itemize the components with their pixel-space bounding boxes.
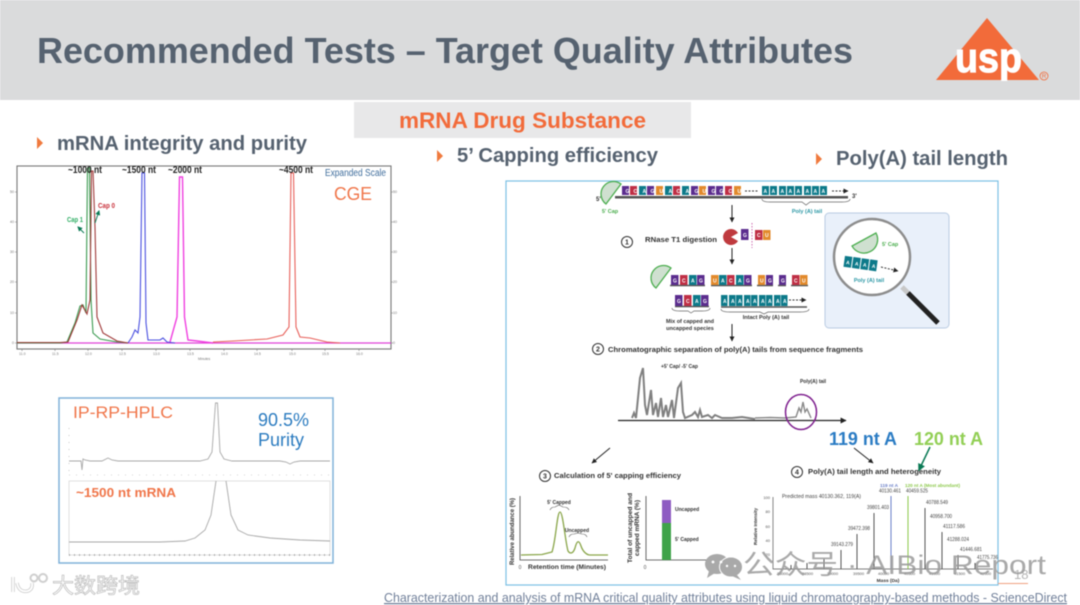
chart: deconvoluted mass spectrum: 40000 [878, 571, 890, 576]
axis labels: 15.5 [322, 352, 329, 356]
USP logo: R [1042, 74, 1047, 80]
axis labels: Minutes [198, 357, 211, 361]
callout: 119 nt A: 119 nt A [829, 429, 897, 449]
label: Cap 1 [67, 217, 84, 233]
page number: 18 [1014, 567, 1028, 582]
arrow [731, 324, 733, 341]
mRNA strand: AAAAAAAA [764, 189, 826, 195]
bullet: mRNA integrity and purity: mRNA integrity and purity [57, 133, 308, 155]
peak labels: ~2000 nt [168, 165, 203, 176]
capped and uncapped species [666, 295, 714, 332]
step 2: chromatographic separation: Chromatographic separation of poly(A) tails from sequence fragments [608, 345, 863, 354]
axis labels: 20 [10, 280, 14, 284]
trace: baseline [17, 342, 391, 344]
lower chromatogram [69, 481, 330, 555]
chart: deconvoluted mass spectrum: 80 [766, 509, 771, 514]
chart: deconvoluted mass spectrum: 39472.398 [848, 526, 870, 532]
arrow [731, 248, 733, 264]
bullet: Poly(A) tail length: Poly(A) tail length [836, 148, 1008, 170]
peak labels [68, 165, 314, 176]
intact Poly(A) tail [721, 295, 809, 321]
axis labels: 11.0 [19, 352, 26, 356]
section banner [354, 102, 691, 138]
chart: deconvoluted mass spectrum: 38500 [802, 571, 814, 576]
chart: retention time curve: 0 [519, 565, 522, 571]
chart: deconvoluted mass spectrum: 40130.461 [879, 488, 901, 494]
magnifier inset: AAAA [846, 260, 876, 270]
sequence fragment chromatogram: +5' Cap/ -5' Cap [661, 364, 698, 370]
capped and uncapped species: GCAG [677, 299, 707, 305]
mRNA strand: 5' [596, 197, 601, 203]
arrow [731, 205, 733, 222]
axis labels: 10 [10, 311, 14, 315]
trace: Cap 0 [17, 171, 128, 343]
intact Poly(A) tail: Intact Poly (A) tail [743, 315, 790, 321]
purity callout: 90.5% [258, 410, 309, 430]
chart: deconvoluted mass spectrum: 39143.279 [831, 542, 853, 548]
magnifier inset: 5' Cap [882, 242, 899, 248]
chart: retention time curve [510, 496, 608, 571]
watermark: WeChat channel: 公众号 · AIBio Report [743, 550, 1047, 580]
peak labels: ~1000 nt [68, 165, 103, 176]
chart: capped vs uncapped bar: 0 [644, 565, 647, 571]
chart: deconvoluted mass spectrum: 40 [766, 538, 771, 543]
USP logo: usp [955, 34, 1022, 81]
step 1: RNase T1 digestion [622, 223, 770, 248]
chart: deconvoluted mass spectrum: Mass (Da) [877, 578, 900, 584]
axis labels: 14.5 [254, 352, 261, 356]
digested fragments [651, 266, 808, 288]
step 1: RNase T1 digestion: 1 [625, 240, 629, 246]
step 2: chromatographic separation: 2 [596, 346, 600, 354]
chart: deconvoluted mass spectrum: 20 [766, 552, 771, 557]
axis labels: 50 [10, 190, 14, 194]
capped and uncapped species: Mix of capped and [666, 319, 714, 325]
panel: CGE electropherogram [10, 165, 397, 361]
axis labels: 10 [393, 311, 397, 315]
axis labels: 50 [393, 190, 397, 194]
watermark: site logo: 大数跨境 [52, 575, 140, 598]
chart: retention time curve: 5' Capped [547, 500, 571, 506]
chart: deconvoluted mass spectrum: 41000 [929, 571, 941, 576]
chart: deconvoluted mass spectrum: 40788.549 [926, 500, 948, 506]
chart: capped vs uncapped bar: Uncapped [675, 507, 699, 513]
label: Cap 0: Cap 0 [98, 203, 115, 210]
title: Recommended Tests – Target Quality Attributes [37, 30, 853, 71]
chart: retention time curve: Retention time (Minutes) [528, 565, 606, 571]
digested fragments: GCAGUACAGUGGCU [673, 278, 806, 284]
axis labels: 40 [10, 220, 14, 224]
chart: deconvoluted mass spectrum: 41446.681 [960, 547, 982, 553]
method label: CGE: CGE [334, 184, 372, 204]
chart: deconvoluted mass spectrum: 119 nt A [880, 483, 899, 488]
magnifier inset [825, 213, 949, 328]
label: Cap 0 [95, 203, 115, 223]
axis labels: 13.0 [153, 352, 160, 356]
chart: capped vs uncapped bar: Total of uncapped and [628, 493, 634, 563]
step 4: Poly(A) tail length and heterogeneity: Poly(A) tail length and heterogeneity [808, 467, 942, 476]
sequence fragment chromatogram: Poly(A) tail [800, 379, 827, 385]
axis labels: 0 [393, 341, 395, 345]
chart: deconvoluted mass spectrum: 41500 [954, 571, 966, 576]
panel: IP-RP-HPLC chromatograms: Purity [258, 430, 304, 450]
axis labels: 20 [393, 280, 397, 284]
chart: deconvoluted mass spectrum: 40459.525 [906, 488, 928, 494]
chart: deconvoluted mass spectrum: 60 [766, 524, 771, 529]
header band [0, 0, 1080, 100]
peak labels: ~4500 nt [279, 165, 314, 176]
step 1: RNase T1 digestion: RNase T1 digestion [645, 235, 717, 244]
axis labels: 12.0 [85, 352, 92, 356]
trace: ~2000 nt [170, 177, 213, 343]
chart: deconvoluted mass spectrum: 41775.736 [977, 555, 998, 561]
chart: deconvoluted mass spectrum: Predicted mass 40130.362, 119(A) [782, 494, 861, 500]
chart: retention time curve: Uncapped [565, 528, 589, 534]
chart: deconvoluted mass spectrum [753, 483, 998, 584]
trace: Cap 1 [17, 168, 128, 343]
axis labels: 30 [10, 250, 14, 254]
mRNA strand: 5' Cap [602, 209, 619, 215]
step 4: Poly(A) tail length and heterogeneity: 4 [795, 470, 799, 476]
arrow [919, 447, 930, 470]
trace: ~1500 nt [128, 173, 175, 343]
watermark: site logo [13, 574, 140, 598]
method label: IP-RP-HPLC [73, 403, 173, 422]
chart: deconvoluted mass spectrum: 100 [763, 495, 771, 500]
chart: deconvoluted mass spectrum: 39801.403 [867, 505, 889, 511]
axis labels: 16.0 [356, 352, 363, 356]
mRNA strand: 3' [852, 194, 857, 200]
source link: Characterization and analysis of mRNA critical quality attributes using liquid chromatography-based methods - ScienceDirect [384, 590, 1067, 605]
sequence fragment chromatogram [618, 364, 846, 430]
length label: ~1500 nt mRNA [76, 485, 177, 500]
panel: LC-MS workflow diagram [506, 181, 998, 585]
step 1: RNase T1 digestion: CU [757, 233, 769, 239]
chart: deconvoluted mass spectrum: 38000 [777, 571, 789, 576]
capped and uncapped species: uncapped species [666, 326, 714, 332]
callout: 120 nt A: 120 nt A [914, 429, 983, 449]
arrow [592, 448, 610, 463]
mRNA strand: GCAGUACAGUGGCU [626, 189, 742, 195]
panel: IP-RP-HPLC chromatograms [59, 398, 333, 563]
chart: capped vs uncapped bar: capped mRNA (%) [635, 500, 641, 556]
step 1: RNase T1 digestion: G [743, 233, 747, 239]
axis labels [10, 190, 397, 361]
arrow [854, 448, 873, 463]
chart: deconvoluted mass spectrum: 41288.024 [947, 537, 969, 543]
magnifier inset: Poly (A) tail [854, 278, 885, 284]
chart: deconvoluted mass spectrum: 41117.586 [943, 524, 965, 530]
axis labels: 14.0 [221, 352, 228, 356]
axis labels: 40 [393, 220, 397, 224]
USP logo [936, 18, 1048, 81]
chart: retention time curve: Relative abundance (%) [510, 498, 516, 565]
chart: capped vs uncapped bar [628, 493, 707, 571]
mRNA strand: Poly (A) tail [792, 209, 823, 215]
trace: ~4500 nt [213, 173, 340, 343]
scale label: Expanded Scale [325, 168, 386, 179]
chart: deconvoluted mass spectrum: 39500 [853, 571, 865, 576]
axis labels: 11.5 [52, 352, 59, 356]
step 3: calculation of capping efficiency: 3 [543, 474, 547, 480]
chart: deconvoluted mass spectrum: 42000 [980, 571, 992, 576]
axis labels: 30 [393, 250, 397, 254]
peak labels: ~1500 nt [122, 165, 157, 176]
bullet: 5' capping efficiency: 5’ Capping efficiency [457, 145, 659, 167]
mRNA strand [596, 182, 857, 215]
chart: deconvoluted mass spectrum: 40958.700 [930, 514, 952, 520]
axis labels: 13.5 [187, 352, 194, 356]
upper chromatogram [69, 403, 330, 475]
chart: deconvoluted mass spectrum: 40500 [904, 571, 916, 576]
chart: capped vs uncapped bar: 5' Capped [675, 537, 699, 543]
page number [998, 567, 1028, 584]
intact Poly(A) tail: AAAAAAAAA [723, 299, 787, 305]
label: Cap 1: Cap 1 [67, 217, 83, 224]
section banner: mRNA Drug Substance [399, 108, 646, 133]
axis labels: 0 [12, 341, 14, 345]
chart: deconvoluted mass spectrum: 39000 [827, 571, 839, 576]
axis labels: 12.5 [119, 352, 126, 356]
chart: deconvoluted mass spectrum: Relative Intensity [753, 507, 758, 545]
chart: deconvoluted mass spectrum: 120 nt A (Most abundant) [905, 483, 961, 488]
axis labels: 15.0 [289, 352, 296, 356]
step 3: calculation of capping efficiency: Calculation of 5' capping efficiency [554, 471, 682, 480]
